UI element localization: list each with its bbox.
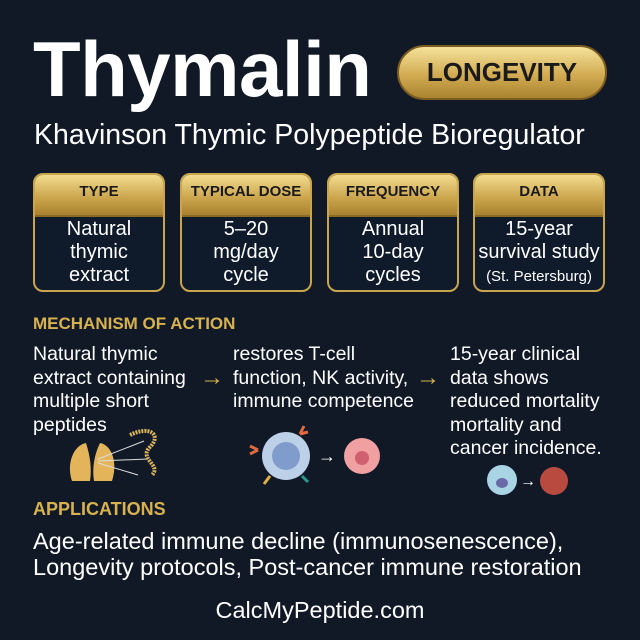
mechanism step 1	[33, 343, 186, 436]
mechanism step 3	[450, 343, 602, 459]
card: type	[33, 173, 165, 292]
applications text: Longevity protocols, Post-cancer immune restoration	[33, 554, 582, 580]
mechanism step 1: Natural thymic	[33, 343, 158, 365]
icon: healthy to cancer cell: →	[520, 473, 536, 490]
mechanism step 3: cancer incidence.	[450, 437, 602, 459]
applications text: Age-related immune decline (immunosenescence),	[33, 528, 563, 554]
mechanism step 2: restores T-cell	[233, 343, 355, 365]
card: data: DATA	[519, 183, 559, 200]
badge: longevity: LONGEVITY	[427, 57, 577, 87]
mechanism step 2: immune competence	[233, 390, 414, 412]
mechanism step 2: function, NK activity,	[233, 366, 408, 388]
card: data: 15-year	[505, 218, 573, 240]
mechanism step 1: extract containing	[33, 366, 186, 388]
card: frequency: FREQUENCY	[346, 183, 440, 200]
mechanism step 2	[233, 343, 414, 412]
mechanism heading: MECHANISM OF ACTION	[33, 314, 235, 333]
icon: thymus and peptides	[70, 428, 157, 481]
card: type: thymic	[70, 241, 128, 263]
subtitle: Khavinson Thymic Polypeptide Bioregulator	[34, 119, 585, 151]
footer: CalcMyPeptide.com	[216, 597, 424, 623]
card: frequency: Annual	[362, 218, 424, 240]
applications heading: APPLICATIONS	[33, 499, 166, 519]
card: type: Natural	[67, 218, 131, 240]
title: Thymalin	[33, 25, 371, 113]
card: dose: TYPICAL DOSE	[191, 183, 301, 200]
mechanism step 3: 15-year clinical	[450, 343, 580, 365]
card: frequency: 10-day	[362, 241, 424, 263]
mechanism step 3: data shows	[450, 366, 549, 388]
mechanism step 1: peptides	[33, 414, 107, 436]
applications text	[33, 528, 582, 580]
card: dose: cycle	[223, 264, 269, 286]
card: type: TYPE	[79, 183, 119, 200]
card: data: survival study	[478, 241, 600, 263]
arrow 1: →	[200, 364, 224, 391]
card: data: (St. Petersburg)	[486, 268, 592, 285]
arrow 2: →	[416, 364, 440, 391]
card: type: extract	[69, 264, 129, 286]
icon: T-cell to NK	[249, 425, 380, 485]
icon: T-cell to NK: →	[318, 446, 336, 466]
icon: healthy to cancer cell	[487, 465, 568, 495]
mechanism step 1: multiple short	[33, 390, 149, 412]
mechanism step 3: mortality and	[450, 414, 562, 436]
card: dose: 5–20	[224, 218, 268, 240]
card: frequency: cycles	[365, 264, 421, 286]
card: data	[473, 173, 605, 292]
card: dose	[180, 173, 312, 292]
mechanism step 3: reduced mortality	[450, 390, 600, 412]
card: dose: mg/day	[213, 241, 279, 263]
badge: longevity	[397, 45, 607, 100]
card: frequency	[327, 173, 459, 292]
